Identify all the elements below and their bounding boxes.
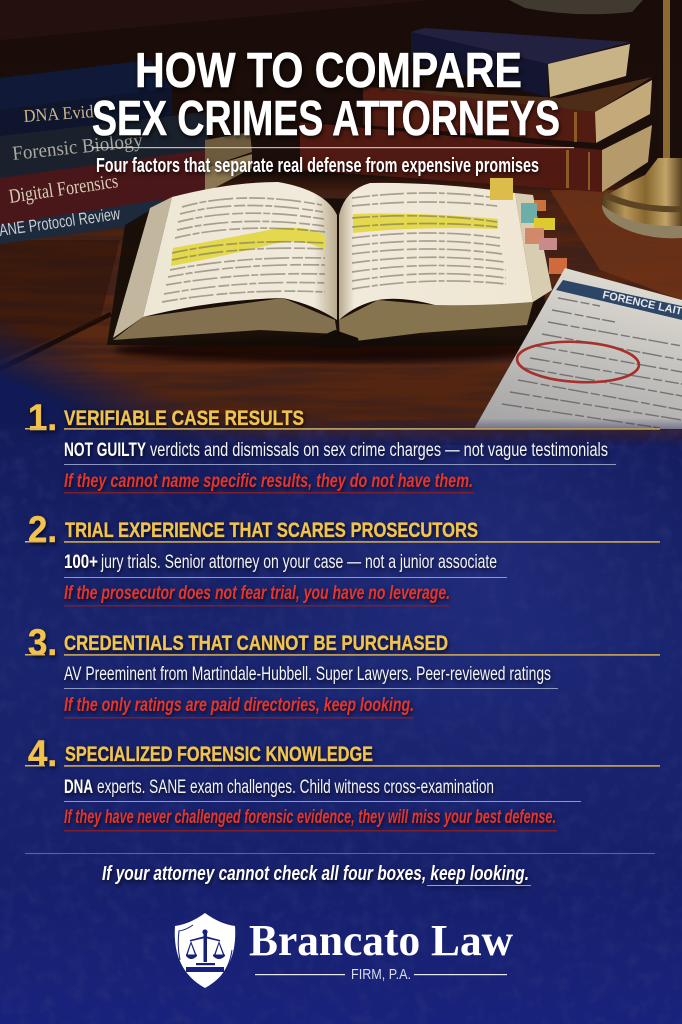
firm tagline: FIRM, P.A. <box>351 966 411 983</box>
book spine: DNA Evidence: DNA Evid <box>23 101 94 126</box>
wordmark: Brancato Law <box>249 916 513 965</box>
description 2: 100+ <box>64 552 98 573</box>
number 4: 4. <box>28 733 57 774</box>
open book <box>107 182 552 362</box>
description 4 <box>64 777 494 798</box>
background: desk photo and wood <box>0 0 682 470</box>
book spine: Digital Forensics: Digital Forensics <box>8 170 120 208</box>
factor 4 <box>25 733 660 832</box>
heading 1: VERIFIABLE CASE RESULTS <box>64 407 304 430</box>
warning 2: If the prosecutor does not fear trial, you have no leverage. <box>64 583 450 604</box>
right page with highlighted passage <box>339 183 533 320</box>
logo: Brancato Law <box>175 913 513 988</box>
description 4: DNA <box>64 777 93 798</box>
book spine: Forensic Biology: Forensic Biology <box>11 129 144 165</box>
heading 4: SPECIALIZED FORENSIC KNOWLEDGE <box>65 743 373 766</box>
closing statement: If your attorney cannot check all four boxes, keep looking. <box>102 863 529 885</box>
heading 3: CREDENTIALS THAT CANNOT BE PURCHASED <box>64 632 448 655</box>
sticky tabs <box>490 178 567 274</box>
factor 2 <box>25 509 660 606</box>
navy panel and photo fade <box>0 240 682 1024</box>
right book stack <box>300 28 652 192</box>
description 4: experts. SANE exam challenges. Child witness cross-examination <box>97 777 494 798</box>
factor 3 <box>25 622 660 718</box>
description 1: NOT GUILTY <box>64 440 146 461</box>
warning 3: If the only ratings are paid directories, keep looking. <box>64 695 414 716</box>
desk lamp <box>509 0 682 238</box>
forensic lab report document <box>474 268 682 429</box>
book spine: SANE Protocol Review: ANE Protocol Review <box>0 204 122 240</box>
description 2 <box>64 552 497 573</box>
heading 2: TRIAL EXPERIENCE THAT SCARES PROSECUTORS <box>65 519 478 542</box>
title: HOW TO COMPARE <box>135 44 522 98</box>
title <box>92 44 560 146</box>
left page with highlighted passage <box>143 182 337 320</box>
number 2: 2. <box>28 509 57 550</box>
factor 1 <box>25 397 660 494</box>
number 1: 1. <box>28 397 57 438</box>
number 3: 3. <box>28 622 57 663</box>
left book stack <box>0 60 252 244</box>
description 2: jury trials. Senior attorney on your case — not a junior associate <box>100 552 497 573</box>
warning 1: If they cannot name specific results, they do not have them. <box>64 471 473 492</box>
icon: shield with scales of justice <box>175 913 235 988</box>
